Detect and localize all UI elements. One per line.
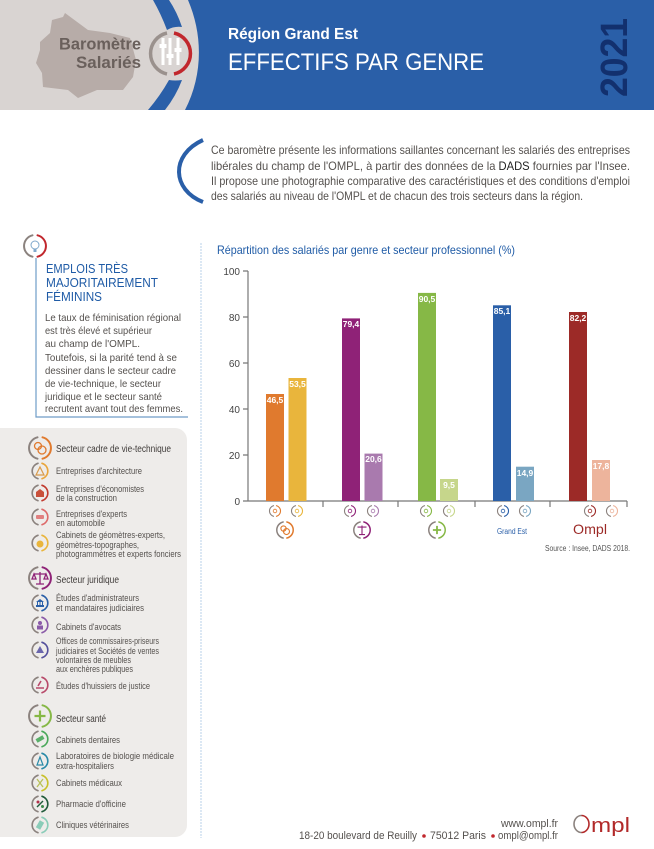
- icon: light bulb: [24, 235, 46, 257]
- axes: 80: [229, 313, 240, 324]
- sector: santé: extra-hospitaliers: [56, 761, 114, 772]
- callout body: au champ de l'OMPL.: [45, 338, 140, 350]
- sector: cadre de vie-technique: Cabinets de géomètres-experts,: [56, 530, 165, 541]
- footer contact: 75012 Paris: [430, 830, 486, 842]
- bars: juridique: 79,4: [343, 319, 360, 329]
- callout body: est très élevé et supérieur: [45, 325, 152, 337]
- header banner: [0, 0, 654, 110]
- callout body: [44, 312, 183, 415]
- callout heading: MAJORITAIREMENT: [46, 275, 158, 290]
- sector: cadre de vie-technique: [29, 437, 181, 560]
- callout heading: EMPLOIS TRÈS: [46, 261, 128, 276]
- sector: juridique: volontaires de meubles: [56, 655, 131, 666]
- sector icons under axis: Ompl: [573, 521, 607, 537]
- axes: 0: [234, 497, 240, 508]
- footer contact: ompl@ompl.fr: [498, 830, 558, 842]
- sector: santé: Cabinets médicaux: [56, 778, 122, 789]
- callout: emplois majoritairement féminins: [24, 235, 188, 417]
- axes: 40: [229, 405, 240, 416]
- bars: santé: 9,5: [443, 480, 455, 490]
- bars: juridique: [342, 318, 382, 501]
- bars: OMPL: [569, 312, 610, 501]
- sector: santé: Laboratoires de biologie médicale: [56, 751, 174, 762]
- sector: santé: Cliniques vétérinaires: [56, 820, 129, 831]
- sector: juridique: Cabinets d'avocats: [56, 622, 121, 633]
- source: Source : Insee, DADS 2018.: [545, 544, 630, 553]
- bars: Grand Est: 85,1: [494, 306, 511, 316]
- logo title: Salariés: [76, 53, 141, 72]
- sector: cadre de vie-technique: photogrammètres et experts fonciers: [56, 549, 181, 560]
- gender icons: [269, 506, 618, 516]
- logo: Ompl: [574, 815, 630, 837]
- bars: OMPL: 17,8: [593, 461, 610, 471]
- footer contact: [299, 818, 558, 842]
- sector: juridique: judiciaires et Sociétés de ventes: [55, 646, 159, 657]
- sector: cadre de vie-technique: géomètres-topographes,: [56, 540, 139, 551]
- callout body: Toutefois, si la parité tend à se: [45, 352, 177, 364]
- intro text: libérales du champ de l'OMPL, à partir des données de la DADS fournies par l'Insee.: [211, 159, 630, 173]
- chart: salaried by gender and sector: [201, 243, 630, 838]
- sector: cadre de vie-technique: Entreprises d'experts: [56, 509, 127, 520]
- sector: juridique: aux enchères publiques: [56, 664, 133, 675]
- callout body: juridique et le secteur santé: [44, 391, 162, 403]
- sector: juridique: Secteur juridique: [56, 574, 119, 586]
- callout body: dessiner dans le secteur cadre: [45, 365, 176, 377]
- sector: santé: Cabinets dentaires: [56, 735, 120, 746]
- panel: sectors legend: [0, 428, 187, 837]
- sector: santé: Pharmacie d'officine: [56, 799, 126, 810]
- callout body: recrutent avant tout des femmes.: [45, 403, 183, 415]
- footer contact: www.ompl.fr: [500, 818, 558, 830]
- header title: EFFECTIFS PAR GENRE: [228, 49, 484, 76]
- bars: juridique: 20,6: [365, 454, 382, 464]
- sector: juridique: Études d'administrateurs: [56, 593, 139, 604]
- bars: cadre de vie-technique: [266, 378, 306, 501]
- axes: 100: [223, 267, 240, 278]
- region map silhouette: [36, 13, 136, 98]
- sector: cadre de vie-technique: Entreprises d'économistes: [56, 484, 144, 495]
- callout body: de vie-technique, le secteur: [45, 378, 161, 390]
- callout body: Le taux de féminisation régional: [45, 312, 181, 324]
- callout heading: [46, 261, 158, 304]
- intro text: des salariés au niveau de l'OMPL et de chacun des trois secteurs dans la région.: [211, 189, 583, 203]
- sector: juridique: et mandataires judiciaires: [56, 603, 144, 614]
- sector: cadre de vie-technique: Entreprises d'architecture: [56, 466, 142, 477]
- sector: juridique: [29, 567, 159, 693]
- logo: Ompl: mpl: [591, 815, 630, 837]
- sector: santé: Secteur santé: [56, 713, 106, 725]
- logo title: Baromètre: [59, 34, 141, 54]
- bars: cadre de vie-technique: 46,5: [267, 395, 284, 405]
- sector: juridique: Études d'huissiers de justice: [56, 681, 150, 692]
- bars: santé: 90,5: [419, 294, 436, 304]
- year: 2021: [594, 18, 636, 97]
- logo title: [59, 34, 141, 72]
- header region label: Région Grand Est: [228, 26, 359, 43]
- sector: cadre de vie-technique: en automobile: [56, 518, 105, 529]
- logo ring icon: [151, 33, 190, 74]
- bars: OMPL: 82,2: [570, 313, 587, 323]
- axes: [223, 267, 627, 508]
- axes: 60: [229, 359, 240, 370]
- intro text: [179, 140, 630, 203]
- chart title: Répartition des salariés par genre et secteur professionnel (%): [217, 243, 515, 257]
- axes: 20: [229, 451, 240, 462]
- sector: juridique: Offices de commissaires-priseurs: [56, 636, 159, 647]
- sector icons under axis: [277, 521, 607, 538]
- bars: cadre de vie-technique: 53,5: [289, 379, 306, 389]
- callout heading: FÉMININS: [46, 289, 102, 304]
- sector icons under axis: Grand Est: [497, 527, 528, 536]
- bars: Grand Est: 14,9: [517, 468, 534, 478]
- sector: cadre de vie-technique: de la construction: [56, 493, 117, 504]
- sector: santé: [29, 705, 174, 833]
- bars: santé: [418, 293, 458, 501]
- footer contact: 18-20 boulevard de Reuilly: [299, 830, 417, 842]
- bars: Grand Est: [493, 305, 534, 501]
- sector: cadre de vie-technique: Secteur cadre de vie-technique: [56, 443, 171, 455]
